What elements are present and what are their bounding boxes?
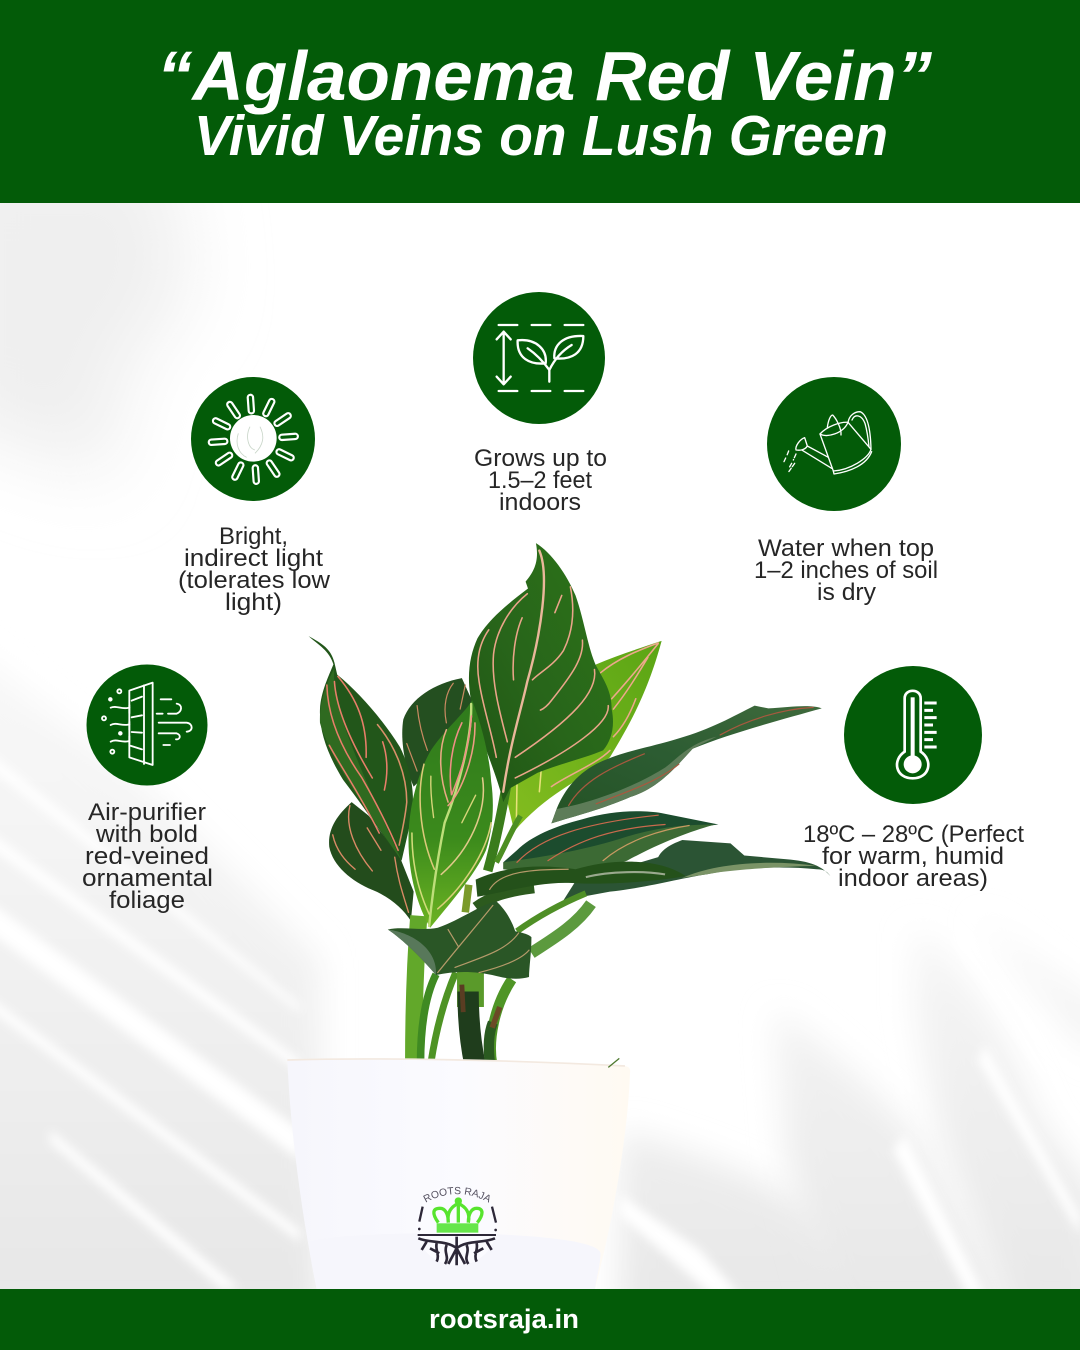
- footer website: rootsraja.in: [429, 1304, 579, 1334]
- caption: water: is dry: [817, 579, 876, 606]
- leaf: small yellow tip: [476, 862, 686, 897]
- caption: air purifier: foliage: [109, 887, 185, 914]
- plant pot: [287, 1058, 630, 1289]
- caption: water: Water when top: [758, 535, 934, 562]
- icon: plant height: [473, 292, 605, 424]
- caption: light: [178, 523, 331, 616]
- caption: temperature: 18ºC – 28ºC (Perfect: [803, 821, 1024, 848]
- caption: height: indoors: [499, 489, 581, 516]
- background: bottom-left shade: [0, 640, 320, 1320]
- leaf: lime back leaf: [507, 641, 662, 831]
- caption: temperature: [803, 821, 1024, 892]
- caption: light: indirect light: [184, 545, 323, 572]
- title: Vivid Veins on Lush Green: [194, 104, 888, 168]
- caption: air purifier: Air-purifier: [88, 799, 206, 826]
- caption: air purifier: red-veined: [85, 843, 209, 870]
- caption: water: 1–2 inches of soil: [754, 557, 938, 584]
- leaf: top big: [469, 543, 613, 802]
- header band: [0, 0, 1080, 203]
- caption: air purifier: with bold: [95, 821, 198, 848]
- background: bottom-right shades: [620, 915, 1080, 1320]
- feature: light: [178, 377, 331, 616]
- caption: water: [754, 535, 938, 606]
- leaf: centre bright: [408, 700, 493, 928]
- background: white streaks right: [620, 925, 1080, 1295]
- icon: air filter: [86, 664, 208, 786]
- caption: temperature: for warm, humid: [822, 843, 1004, 870]
- caption: light: light): [225, 589, 282, 616]
- leaf: long right: [551, 706, 822, 823]
- leaf: middle right: [503, 811, 718, 872]
- stems: upper right: [465, 785, 591, 953]
- caption: air purifier: [82, 799, 213, 914]
- plant: [309, 543, 830, 1065]
- caption: height: Grows up to: [474, 445, 607, 472]
- caption: light: (tolerates low: [178, 567, 331, 594]
- pot logo: [418, 1186, 498, 1266]
- title: [157, 37, 932, 168]
- background: white streaks left: [0, 615, 300, 1289]
- leaf: curled bottom: [388, 901, 531, 979]
- caption: height: [474, 445, 607, 516]
- caption: height: 1.5–2 feet: [488, 467, 592, 494]
- leaf: left: [309, 636, 413, 861]
- leaf: back left lower: [329, 802, 414, 921]
- caption: light: Bright,: [219, 523, 288, 550]
- stems: base: [414, 916, 512, 1065]
- feature: temperature: [803, 666, 1024, 892]
- icon: watering can: [767, 377, 901, 511]
- caption: air purifier: ornamental: [82, 865, 213, 892]
- icon: thermometer: [844, 666, 982, 804]
- feature: height: [473, 292, 607, 516]
- icon: sun: [191, 377, 315, 501]
- leaf: back middle dark: [402, 678, 479, 787]
- background: top-left shade: [0, 150, 190, 480]
- feature: water: [754, 377, 938, 606]
- leaf: lower right: [563, 840, 830, 900]
- pot logo: ROOTS RAJA: [423, 1186, 490, 1203]
- caption: temperature: indoor areas): [838, 865, 988, 892]
- feature: air purifier: [82, 664, 213, 914]
- title: “Aglaonema Red Vein”: [157, 37, 932, 115]
- footer band: [0, 1289, 1080, 1350]
